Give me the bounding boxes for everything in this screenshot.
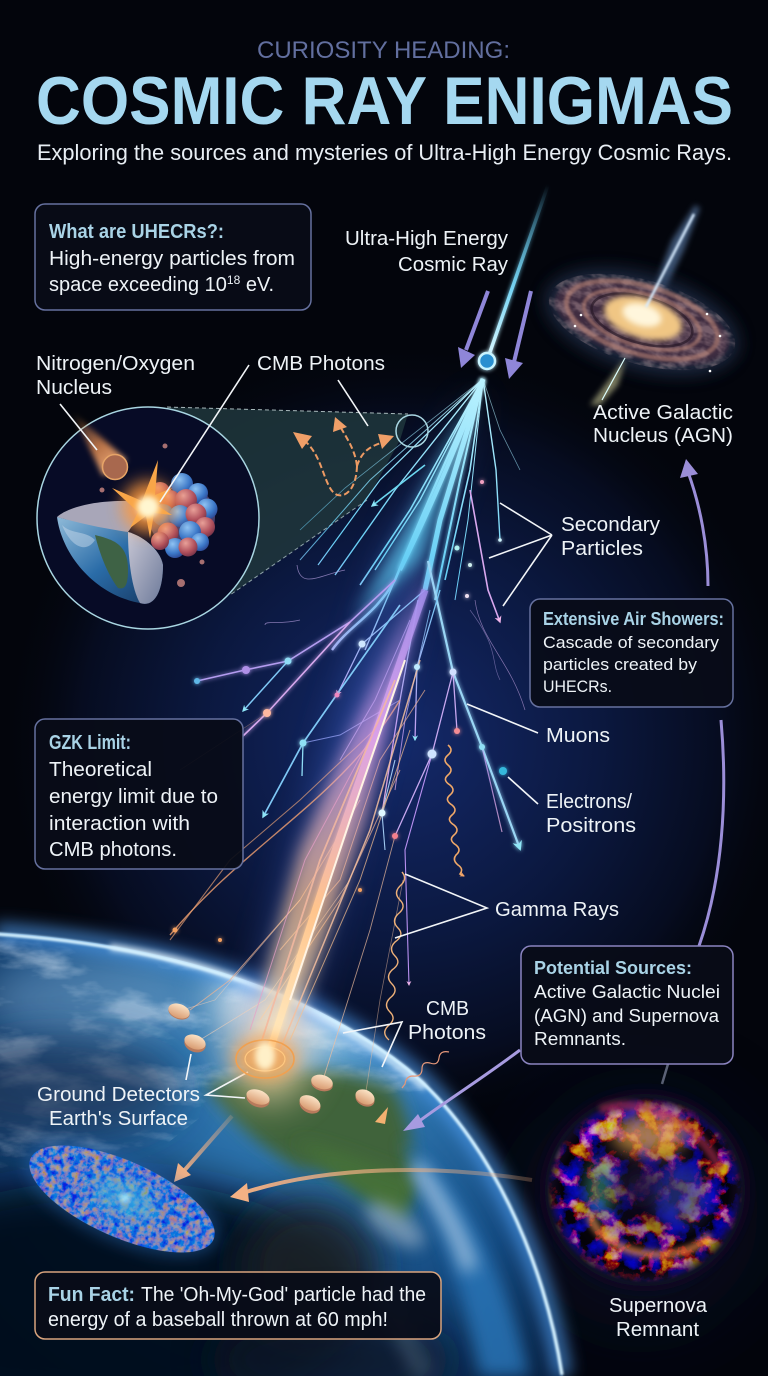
panel body: UHECRs. [543, 677, 612, 696]
kicker heading: CURIOSITY HEADING: [257, 37, 510, 64]
particle nodes [172, 480, 507, 942]
panel body: particles created by [543, 655, 698, 674]
main beam [170, 379, 525, 1098]
labels: shower and collision [36, 353, 660, 921]
label: secondary particles: Particles [561, 538, 643, 560]
label: electrons positrons: Positrons [546, 815, 636, 837]
label: ultra-high energy cosmic ray: Ultra-High Energy [345, 228, 508, 250]
label: ultra-high energy cosmic ray: Cosmic Ray [398, 254, 508, 276]
source flow arrows [174, 459, 724, 1202]
leader lines [60, 365, 552, 1098]
supernova remnant [545, 1094, 745, 1286]
cone: zoom from CMB circle to nucleus [167, 407, 408, 595]
label: electrons positrons [546, 791, 636, 837]
panel body: CMB photons. [49, 839, 177, 861]
subtitle: Exploring the sources and mysteries of Ultra-High Energy Cosmic Rays. [37, 140, 732, 165]
label: ground detectors and Earth's surface: Earth's Surface [49, 1108, 188, 1130]
fun fact text: energy of a baseball thrown at 60 mph! [48, 1309, 388, 1331]
label: CMB photons lower [408, 998, 486, 1044]
panel heading: GZK Limit: [49, 732, 131, 754]
label: electrons positrons: Electrons/ [546, 791, 632, 813]
panel body: interaction with [49, 813, 190, 835]
panel body: space exceeding 10 [49, 274, 227, 296]
ground impact point [233, 1036, 297, 1080]
panel body: High-energy particles from [49, 248, 295, 270]
panel body [49, 759, 218, 861]
CMB sky map [10, 1118, 234, 1280]
nucleus collision inset [37, 407, 259, 629]
label: secondary particles: Secondary [561, 514, 660, 536]
panel: potential sources [521, 946, 733, 1064]
panel body: energy limit due to [49, 786, 218, 808]
arrow from sources to air shower panel [699, 720, 724, 946]
incoming ultra-high energy ray [479, 185, 548, 369]
label: active galactic nucleus [593, 402, 733, 447]
panel body [534, 981, 720, 1049]
incoming nucleus meteor [72, 412, 128, 480]
label: supernova remnant [609, 1295, 708, 1341]
collision spark [112, 460, 174, 538]
panel: GZK limit [35, 719, 243, 869]
label: ultra-high energy cosmic ray [345, 228, 508, 276]
panel heading: What are UHECRs?: [49, 221, 224, 243]
arrow Earth to CMB map [174, 1116, 232, 1182]
fun fact text: Fun Fact: [48, 1284, 135, 1306]
small zoom circle on the shower [396, 415, 428, 447]
panel heading: Potential Sources: [534, 957, 692, 978]
arrow to Earth from sources [403, 1050, 520, 1131]
label: CMB photons upper: CMB Photons [257, 353, 385, 375]
label: active galactic nucleus: Active Galactic [593, 402, 733, 424]
label: supernova remnant: Remnant [616, 1319, 699, 1341]
supernova connector [662, 1064, 668, 1084]
panel body: Remnants. [534, 1028, 626, 1049]
label: supernova remnant: Supernova [609, 1295, 708, 1317]
label: muons: Muons [546, 725, 610, 747]
shower of secondary particles [170, 185, 548, 1098]
gamma ray squiggle lower [385, 872, 405, 1040]
arrow supernova to CMB map [230, 1170, 532, 1202]
panel body: Theoretical [49, 759, 152, 781]
arrows into the primary particle [458, 291, 531, 379]
panel: fun fact [35, 1272, 441, 1339]
label: nitrogen/oxygen nucleus: Nitrogen/Oxygen [36, 353, 195, 375]
panel body: (AGN) and Supernova [534, 1005, 720, 1026]
cutaway Earth wedge [57, 501, 163, 604]
panel body: Cascade of secondary [543, 633, 720, 652]
arrow up to AGN [680, 459, 708, 586]
label: nitrogen/oxygen nucleus: Nucleus [36, 377, 112, 399]
title block [36, 37, 733, 165]
CMB squiggle [402, 1052, 449, 1088]
label: CMB photons lower: Photons [408, 1022, 486, 1044]
label: nitrogen/oxygen nucleus [36, 353, 195, 399]
central bright beam [250, 560, 432, 1050]
gamma ray squiggle [445, 745, 464, 876]
active galactic nucleus galaxy [533, 205, 751, 405]
panel: extensive air showers [530, 599, 733, 707]
panel body: Active Galactic Nuclei [534, 981, 720, 1002]
label: ground detectors and Earth's surface: Ground Detectors [37, 1084, 200, 1106]
label: secondary particles [561, 514, 660, 560]
panel body: eV. [240, 274, 274, 296]
arrow tip left upper [372, 465, 425, 506]
panel: what are UHECRs [35, 204, 311, 310]
panel heading: Extensive Air Showers: [543, 609, 724, 629]
label: CMB photons lower: CMB [426, 998, 469, 1020]
planet Earth [0, 920, 563, 1376]
fun fact text [48, 1284, 426, 1331]
glow under shower [240, 380, 483, 1050]
label: active galactic nucleus: Nucleus (AGN) [593, 425, 733, 447]
ground detectors [166, 1001, 388, 1124]
fun fact text: The 'Oh-My-God' particle had the [141, 1284, 426, 1306]
panel body [543, 633, 720, 696]
panel body: 18 [227, 273, 241, 287]
label: gamma rays: Gamma Rays [495, 899, 619, 921]
label: ground detectors and Earth's surface [37, 1084, 200, 1130]
debris [100, 444, 204, 587]
panel body [49, 248, 295, 296]
proton neutron cluster [149, 473, 218, 558]
dashed photon paths [293, 417, 394, 495]
